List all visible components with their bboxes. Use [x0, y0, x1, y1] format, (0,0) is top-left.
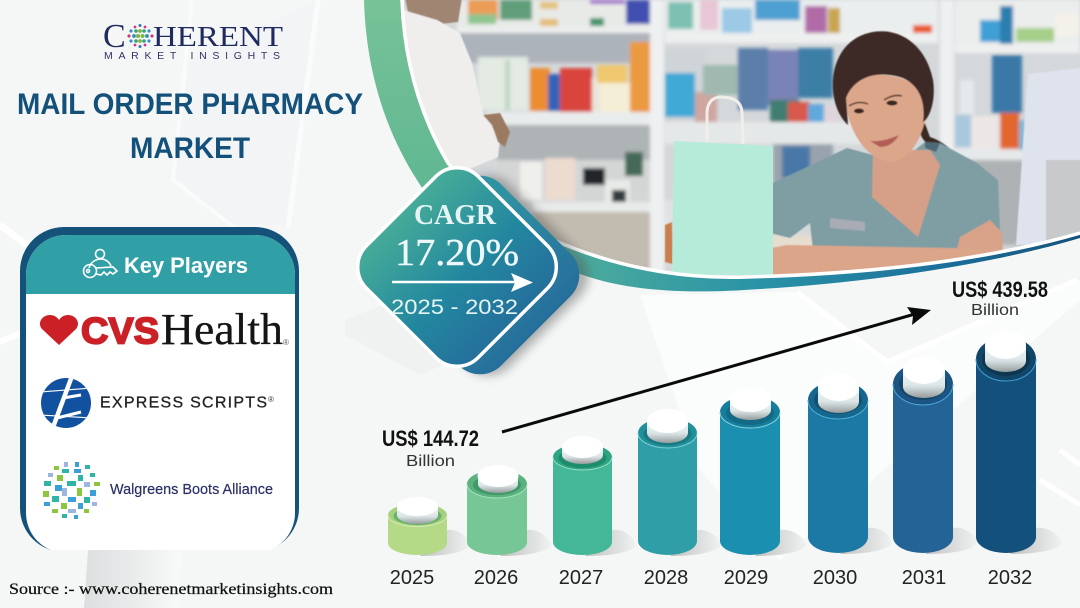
bar 2032: [976, 331, 1062, 554]
callout: 2025 value: [382, 426, 479, 470]
arrow: CAGR period: [392, 273, 533, 292]
shelves and products: [457, 0, 1080, 282]
logo: Coherent Market Insights: [103, 18, 283, 62]
logo: Coherent Market Insights: HERENT: [153, 22, 283, 53]
bar 2030: [808, 373, 892, 554]
year labels: 2027: [559, 567, 603, 589]
year labels: 2030: [813, 567, 857, 589]
logo: CVS Health: ®: [283, 338, 289, 347]
paper bag: [672, 97, 773, 275]
bar 2029: [720, 388, 806, 556]
title: MARKET: [130, 132, 250, 165]
logo: Express Scripts: [40, 376, 274, 430]
callout: 2032 value: Billion: [971, 302, 1019, 319]
logo: Walgreens Boots Alliance: [43, 462, 273, 519]
logo: CVS Health: Health: [161, 305, 283, 354]
bar 2026: [467, 465, 551, 556]
logo: CVS Health: [40, 305, 289, 354]
callout: 2025 value: US$ 144.72: [382, 426, 479, 451]
heading: key players: Key Players: [124, 253, 248, 278]
year labels: 2025: [390, 567, 434, 589]
callout: 2032 value: [952, 277, 1048, 319]
pharmacist in background: [400, 0, 510, 170]
callout: 2025 value: Billion: [406, 453, 455, 470]
year labels: 2032: [988, 567, 1032, 589]
logo: Express Scripts: ®: [268, 395, 274, 404]
logo: Express Scripts: EXPRESS SCRIPTS: [100, 394, 267, 412]
CAGR badge: 2025 - 2032: [391, 296, 518, 319]
green curved band: [364, 0, 470, 192]
callout: 2032 value: US$ 439.58: [952, 277, 1048, 302]
year labels: 2029: [724, 567, 768, 589]
woman in scrubs: [665, 31, 1003, 280]
title: MAIL ORDER PHARMACY: [17, 88, 363, 121]
logo: Coherent Market Insights: MARKET INSIGHTS: [104, 50, 280, 62]
year labels: [390, 567, 1032, 589]
bar 2027: [553, 436, 636, 556]
CAGR badge: 17.20%: [395, 232, 519, 274]
icon: person with key: [84, 250, 117, 278]
year labels: 2026: [474, 567, 518, 589]
icon: Walgreens globe: [43, 462, 100, 519]
logo: CVS Health: CVS: [81, 310, 159, 352]
bar 2031: [893, 356, 977, 554]
bar 2028: [638, 409, 721, 556]
panel: key players: [20, 227, 299, 553]
CAGR badge: CAGR: [414, 200, 497, 231]
icon: logo globe dots: [127, 24, 154, 48]
source: Source :- www.coherenetmarketinsights.com: [9, 581, 334, 598]
logo: Walgreens Boots Alliance: Walgreens Boots Alliance: [110, 481, 273, 498]
year labels: 2031: [902, 567, 946, 589]
right monitor: [1016, 68, 1080, 245]
CAGR badge: [345, 155, 601, 388]
title: [17, 88, 363, 165]
bar chart: market size 2025-2032: [388, 331, 1062, 589]
photo: pharmacist with bag in pharmacy: [400, 0, 1080, 290]
logo: Coherent Market Insights: C: [103, 18, 126, 55]
teal blue curved band: [555, 228, 1080, 291]
bar 2025: [388, 497, 470, 556]
year labels: 2028: [644, 567, 688, 589]
arrow: growth trend: [502, 307, 931, 432]
